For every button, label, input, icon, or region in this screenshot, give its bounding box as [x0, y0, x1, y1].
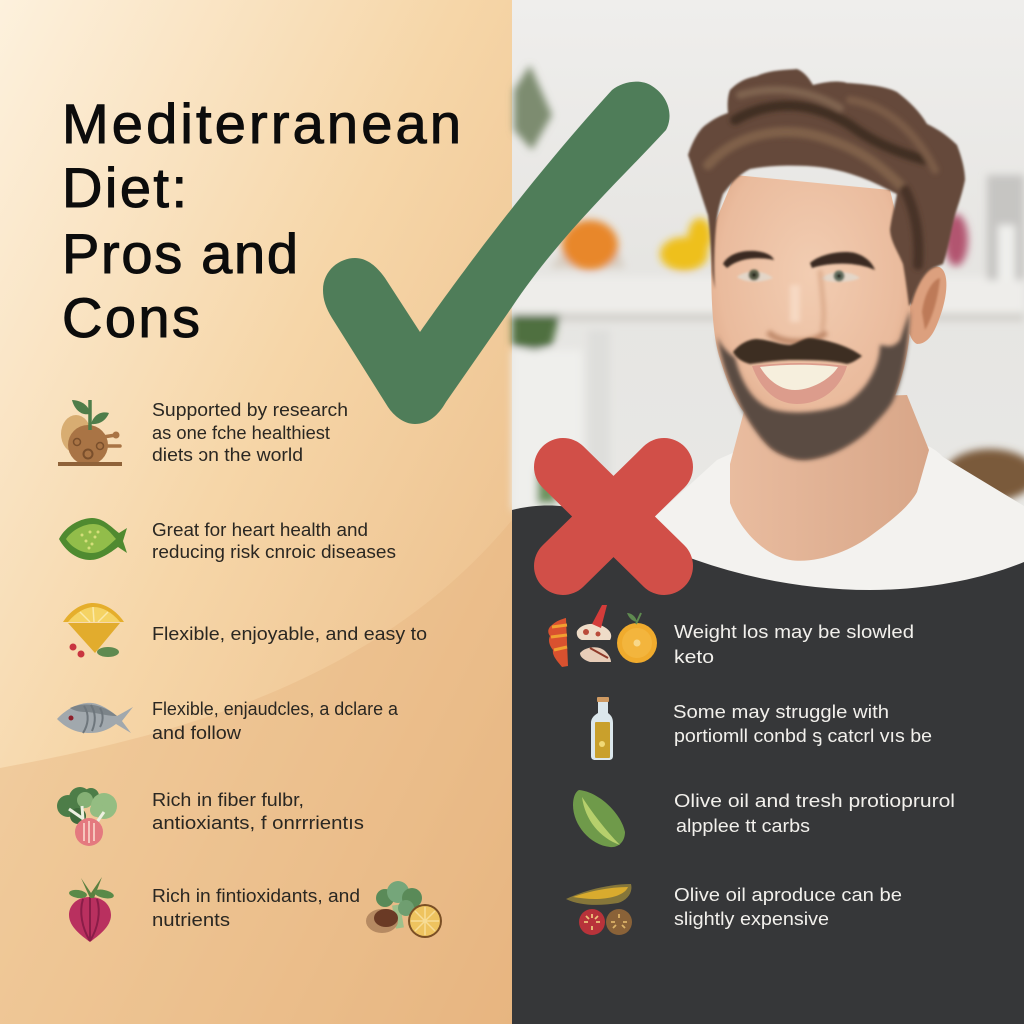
con 4: expense: slightly expensive	[674, 909, 829, 929]
photo: kitchen background	[512, 0, 1024, 530]
icon: green olive leaf	[573, 790, 625, 847]
neck	[730, 395, 929, 561]
icon: banana and fruit halves	[566, 884, 632, 935]
con 1: weight loss	[548, 605, 914, 667]
pro 3: flexible: Flexible, enjoyable, and easy to	[152, 624, 427, 644]
icon: beet	[69, 877, 115, 942]
pro 5: fiber	[57, 787, 364, 846]
pro 4: follow: Flexible, enjaudcles, a dclare a	[152, 699, 399, 719]
pro 2: heart health: reducing risk cnroic diseases	[152, 542, 396, 562]
pro 2: heart health: Great for heart health and	[152, 520, 368, 540]
moustache	[733, 338, 862, 364]
con 2: portion control: portiomll conbd ᶊ catcrl vıs be	[674, 726, 932, 746]
pro 4: follow: and follow	[152, 723, 242, 743]
con 3: olive oil	[573, 790, 955, 847]
hair	[688, 69, 965, 306]
icon: red cross	[563, 467, 664, 566]
cons list	[548, 605, 955, 935]
title: Pros and	[62, 222, 298, 285]
icon: green check mark	[323, 82, 670, 424]
eyebrows	[723, 251, 774, 268]
panel: cons background	[512, 506, 1024, 1024]
con 4: expense	[566, 884, 902, 935]
icon: grey fish	[57, 703, 133, 733]
pro 5: fiber: antioxiants, f onrrrientıs	[152, 813, 364, 833]
icon: green fish	[59, 518, 127, 560]
pro 2: heart health	[59, 518, 396, 562]
con 2: portion control	[591, 697, 932, 760]
title: Diet:	[62, 156, 187, 219]
con 2: portion control: Some may struggle with	[673, 702, 889, 722]
pro 6: antioxidants: nutrients	[152, 910, 230, 930]
pro 6: antioxidants: Rich in fintioxidants, and	[152, 886, 360, 906]
shirt	[640, 440, 1024, 600]
con 1: weight loss: Weight los may be slowled	[674, 622, 914, 642]
title: Mediterranean	[62, 92, 461, 155]
pro 6: antioxidants	[69, 877, 442, 942]
pro 1: research: diets ɔn the world	[152, 445, 303, 465]
pro 1: research: Supported by research	[152, 400, 348, 420]
icon: lemon slice	[63, 603, 124, 658]
icon: broccoli and onion	[57, 787, 117, 846]
face	[711, 175, 910, 460]
pro 4: follow	[57, 699, 399, 743]
con 3: olive oil: alpplee tt carbs	[676, 816, 810, 836]
title	[62, 92, 461, 349]
pro 3: flexible	[63, 603, 427, 658]
eyes	[737, 270, 860, 282]
nose	[768, 270, 826, 342]
title: Cons	[62, 286, 200, 349]
icon: olive oil bottle	[591, 697, 613, 760]
icon: vegetables and citrus	[366, 881, 442, 938]
pro 1: research: as one fche healthiest	[152, 423, 330, 443]
hair highlights	[708, 90, 935, 265]
panel: pros background	[0, 0, 512, 1024]
con 1: weight loss: keto	[674, 647, 714, 667]
pros list	[57, 400, 442, 942]
pro 5: fiber: Rich in fiber fulbr,	[152, 790, 304, 810]
stubble beard	[717, 310, 910, 460]
pro 1: research	[58, 400, 348, 466]
photo: smiling man	[640, 69, 1024, 600]
icon: peppers, ham and orange	[548, 605, 657, 667]
icon: potato and chicken	[58, 400, 122, 466]
mouth	[752, 363, 847, 404]
ear	[908, 267, 946, 344]
con 4: expense: Olive oil aproduce can be	[674, 885, 902, 905]
con 3: olive oil: Olive oil and tresh protioprurol	[674, 791, 955, 811]
